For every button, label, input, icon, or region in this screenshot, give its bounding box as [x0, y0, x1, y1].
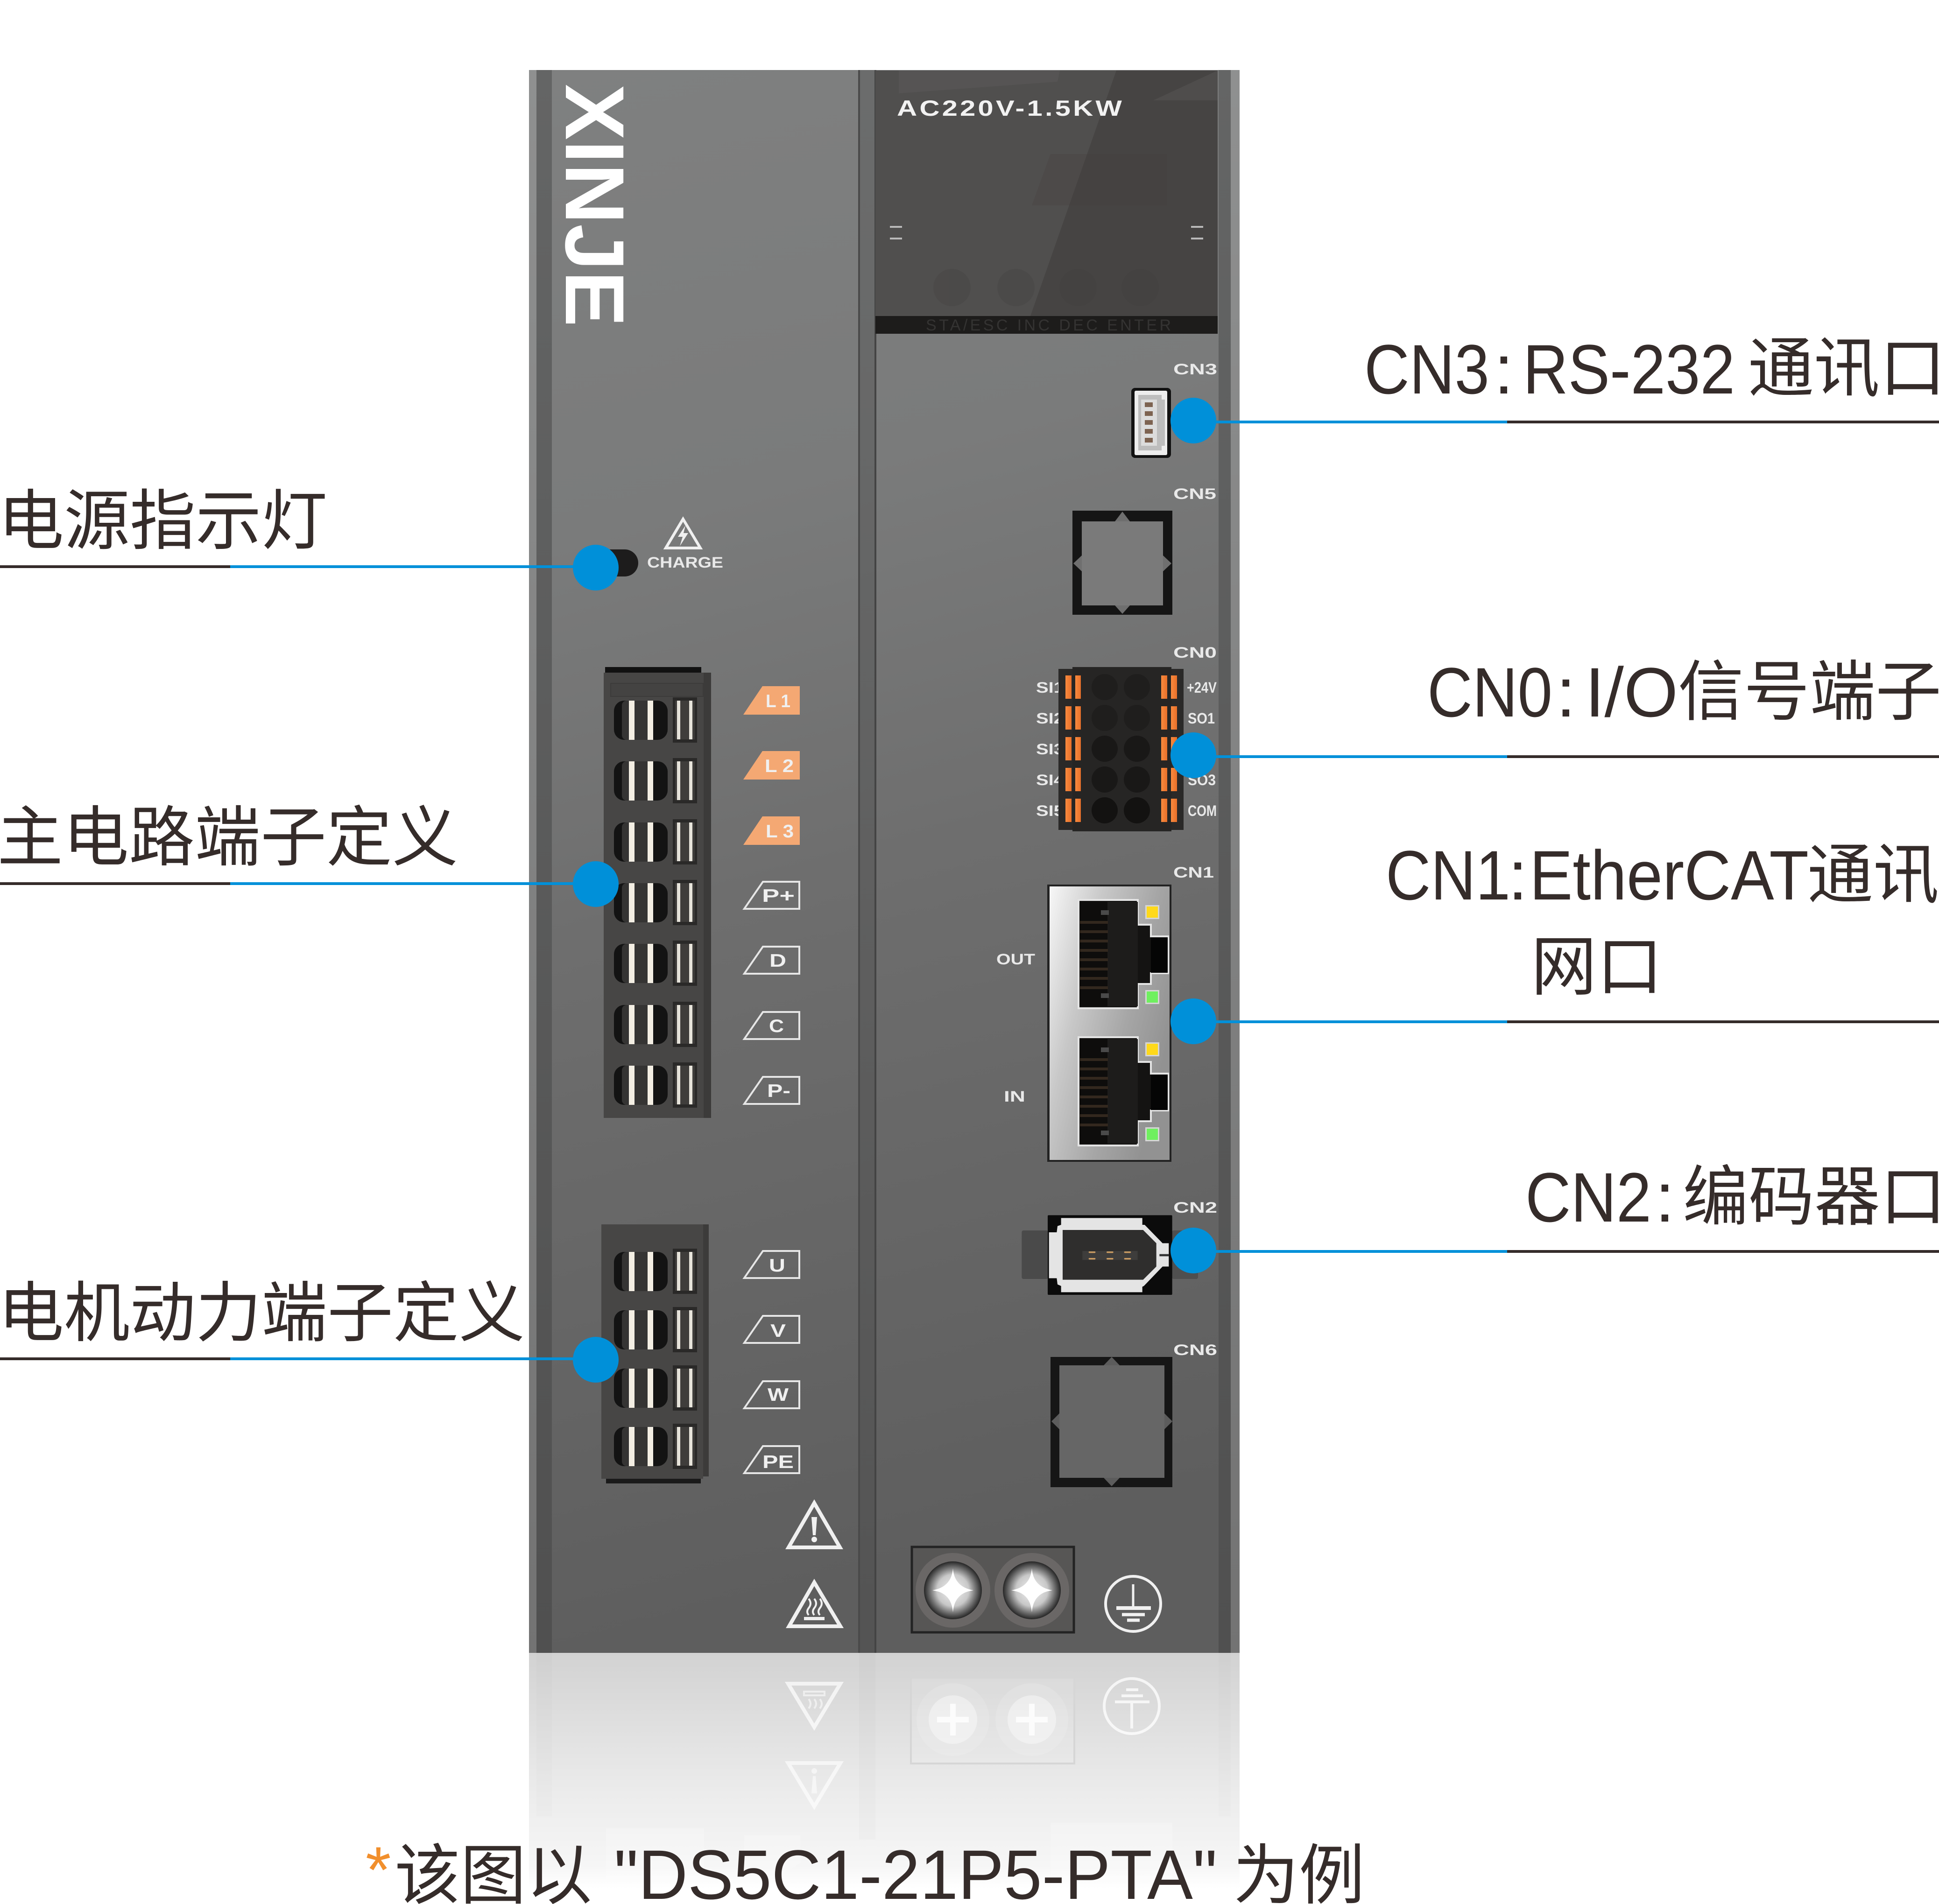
- tag W: [744, 1381, 799, 1408]
- tag L3: [743, 816, 800, 845]
- label: I/O: [1585, 653, 1678, 731]
- screw right: [994, 1553, 1069, 1628]
- ground screws: [912, 1547, 1074, 1632]
- reflected caution triangle: [788, 1763, 840, 1806]
- screw left: [916, 1553, 990, 1628]
- label line one: :: [1508, 836, 1528, 914]
- connector CN3: [1131, 361, 1217, 458]
- connector CN6: [1051, 1342, 1217, 1487]
- label: :: [1494, 330, 1514, 408]
- callout: motor power terminals: [0, 1276, 619, 1383]
- right signal labels: SO3: [1188, 772, 1216, 788]
- tag L1: L 1: [766, 691, 790, 711]
- right signal labels: [1187, 679, 1217, 819]
- marker dot: [573, 545, 619, 590]
- callout: CN0 I/O: [1170, 653, 1939, 778]
- reflected terminal blocks: [606, 1823, 1172, 1884]
- tag L1: [743, 686, 800, 715]
- CN5 label: CN5: [1173, 485, 1216, 502]
- left signal labels: SI2: [1036, 710, 1064, 727]
- display window: [875, 70, 1218, 334]
- right signal labels: COM: [1188, 802, 1217, 819]
- footnote: [366, 1833, 1365, 1904]
- tag L2: [743, 751, 800, 780]
- label: RS-232: [1523, 330, 1735, 408]
- display button legend: STA/ESC INC DEC ENTER: [926, 316, 1171, 334]
- charge indicator: [586, 519, 723, 576]
- high voltage triangle icon: [666, 519, 700, 548]
- main circuit terminal block: [604, 667, 711, 1118]
- icon: hot surface triangle: [789, 1582, 840, 1626]
- connector CN0 I/O: [1036, 644, 1217, 831]
- marker dot: [573, 861, 619, 907]
- icon: caution triangle: [789, 1503, 840, 1547]
- tag C: C: [769, 1016, 784, 1036]
- left signal labels: SI3: [1036, 741, 1064, 758]
- label: CN2: [1525, 1158, 1651, 1237]
- callout: main circuit terminals: [0, 801, 619, 907]
- tag L2: L 2: [765, 756, 794, 776]
- brand logo XINJE: XINJE: [548, 84, 642, 327]
- icon: protective ground: [1106, 1576, 1161, 1631]
- left signal labels: [1036, 679, 1064, 819]
- marker dot: [573, 1337, 619, 1383]
- front face: [529, 70, 1240, 1653]
- label line one: [1386, 836, 1939, 914]
- reflected ground symbol: [1104, 1679, 1159, 1734]
- tag P+: [744, 882, 799, 909]
- label: :: [1655, 1158, 1675, 1237]
- CN1 label: CN1: [1173, 864, 1214, 881]
- CHARGE label: CHARGE: [647, 554, 723, 571]
- tag D: [744, 947, 799, 974]
- label: 电源指示灯: [0, 484, 327, 558]
- IN label: IN: [1004, 1088, 1025, 1105]
- reflected screw block: [911, 1678, 1074, 1763]
- CN2 label: CN2: [1173, 1199, 1217, 1216]
- left signal labels: SI5: [1036, 802, 1064, 819]
- CN6 label: CN6: [1173, 1342, 1217, 1358]
- tag V: [744, 1316, 799, 1343]
- label: CN3: [1364, 330, 1489, 408]
- label line two: 网口: [1531, 930, 1663, 1004]
- silver RJ45 shell: [1047, 885, 1171, 1162]
- reflected heat warning triangle: [788, 1684, 840, 1727]
- connector CN1 EtherCAT: [996, 864, 1214, 1162]
- left signal labels: SI1: [1036, 679, 1064, 696]
- right signal labels: SO1: [1188, 710, 1215, 727]
- label: [1525, 1158, 1939, 1237]
- tag L3: L 3: [766, 822, 794, 842]
- marker dot: [1170, 1228, 1216, 1273]
- tag U: [744, 1251, 799, 1278]
- tag D: D: [769, 951, 786, 971]
- label: [1427, 653, 1939, 731]
- tag PE: PE: [762, 1452, 794, 1472]
- tag P-: P-: [767, 1081, 790, 1101]
- marker dot: [1170, 998, 1216, 1044]
- tag W: W: [768, 1385, 789, 1405]
- port IN: [1079, 1037, 1168, 1145]
- right signal labels: SO2: [1188, 741, 1215, 758]
- centre divider: [858, 70, 876, 1653]
- panel: servo drive body: [529, 70, 1240, 1653]
- CN0 label: CN0: [1173, 644, 1217, 661]
- motor tags: [744, 1251, 799, 1473]
- label: :: [1556, 653, 1576, 731]
- label line one: CN1: [1386, 836, 1510, 914]
- marker dot: [1170, 732, 1216, 778]
- motor power terminal block: [601, 1224, 709, 1483]
- callout: CN1 EtherCAT: [1170, 836, 1939, 1044]
- label line one: EtherCAT: [1530, 836, 1809, 914]
- left signal labels: SI4: [1036, 772, 1064, 788]
- label: 编码器口: [1683, 1160, 1939, 1234]
- port OUT: [1079, 900, 1168, 1008]
- connector CN2 encoder: [1022, 1199, 1217, 1295]
- main circuit tags: [743, 686, 800, 1104]
- callout: CN2 encoder: [1170, 1158, 1939, 1273]
- label: 电机动力端子定义: [0, 1276, 525, 1350]
- label: 主电路端子定义: [0, 801, 458, 874]
- tag C: [744, 1012, 799, 1039]
- tag V: V: [770, 1321, 786, 1341]
- label: [1364, 330, 1939, 408]
- callout: power indicator: [0, 484, 619, 590]
- right edge strips: [1219, 70, 1240, 1653]
- label: CN0: [1427, 653, 1552, 731]
- label: 信号端子: [1678, 655, 1939, 729]
- marker dot: [1170, 398, 1216, 443]
- reflection of the drive below the body: [529, 1653, 1240, 1889]
- tag P+: P+: [762, 886, 795, 906]
- label line one: 通讯: [1807, 838, 1939, 912]
- tag P-: [744, 1077, 799, 1104]
- tag PE: [744, 1446, 799, 1473]
- right signal labels: +24V: [1187, 679, 1217, 696]
- connector CN5: [1072, 485, 1216, 615]
- callout: CN3 RS-232: [1170, 330, 1939, 443]
- OUT label: OUT: [996, 951, 1036, 968]
- rating text: AC220V-1.5KW: [897, 96, 1124, 120]
- left edge strips: [529, 70, 552, 1653]
- tag U: U: [769, 1256, 785, 1276]
- CN3 label: CN3: [1173, 361, 1217, 378]
